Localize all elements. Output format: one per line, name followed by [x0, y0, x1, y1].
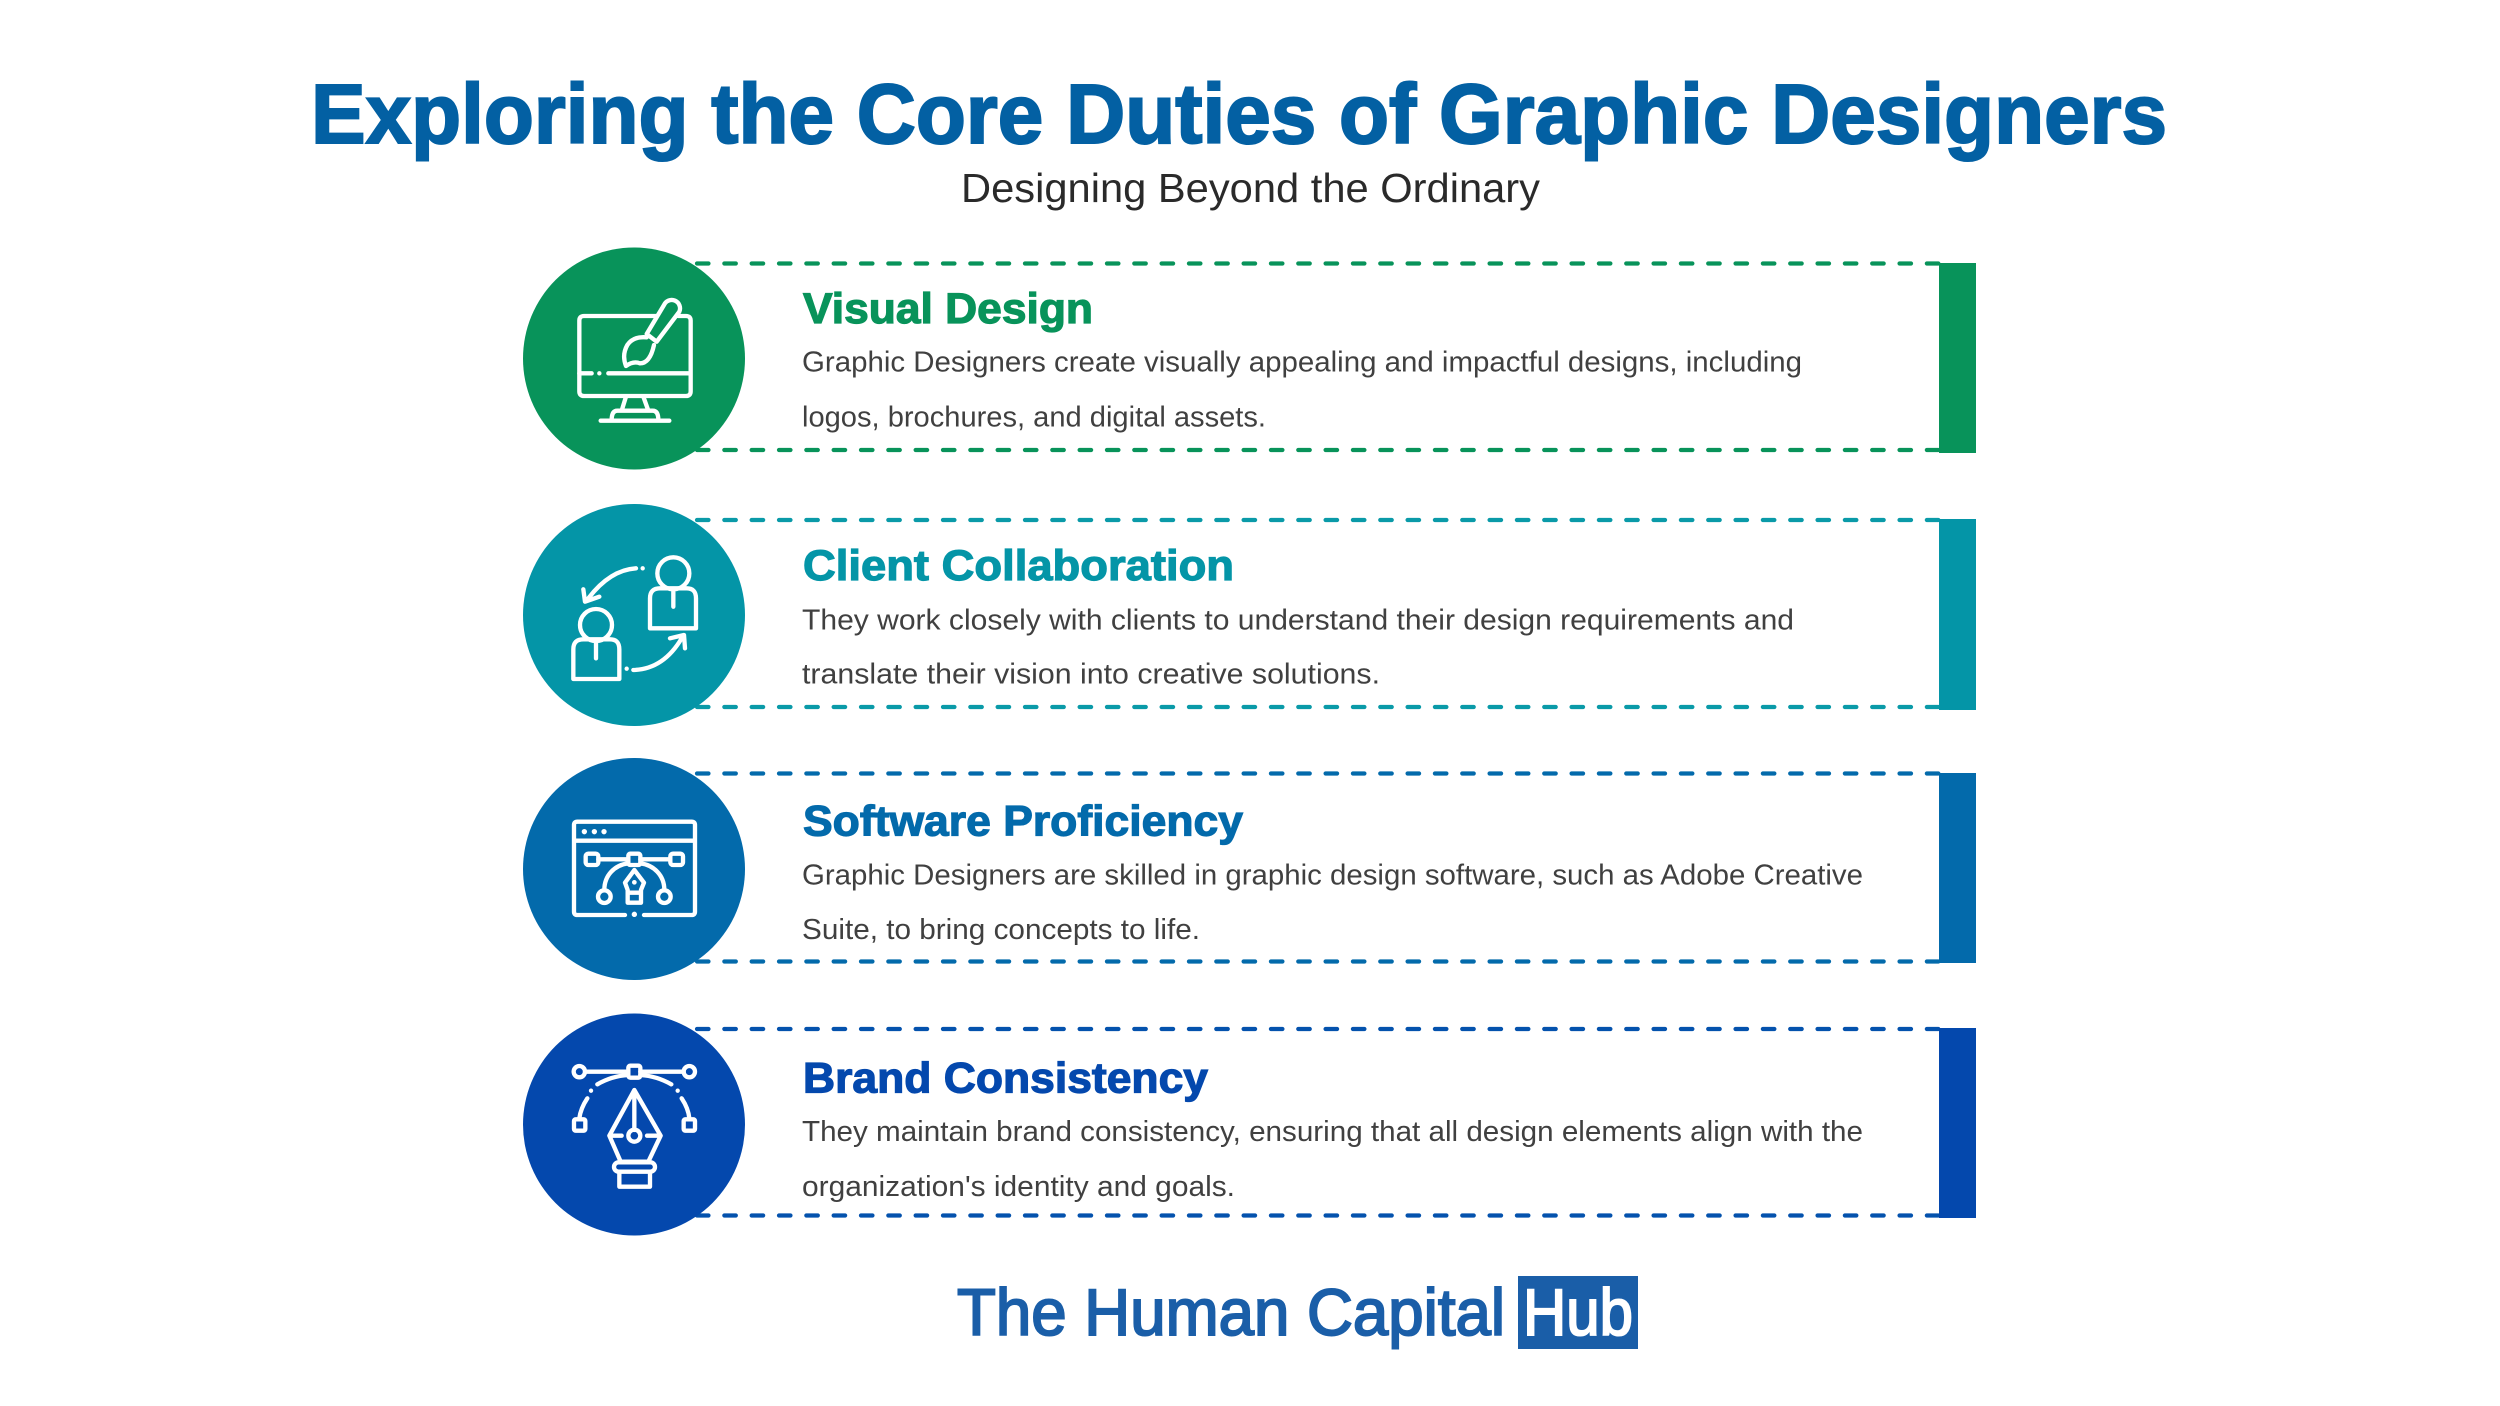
heading: brand consistency: Brand Consistency [803, 1054, 1208, 1102]
text: software proficiency: Graphic Designers are skilled in graphic design software, such as Adobe Creative [802, 860, 1863, 892]
subtitle: Designing Beyond the Ordinary [961, 165, 1541, 211]
panel: brand consistency [523, 1014, 1976, 1236]
text: client collaboration [802, 604, 1794, 690]
text: software proficiency: Suite, to bring concepts to life. [802, 914, 1200, 946]
panel: software proficiency [523, 758, 1976, 980]
text: client collaboration: They work closely with clients to understand their design requirements and [802, 604, 1794, 636]
title: Exploring the Core Duties of Graphic Designers [311, 67, 2167, 161]
heading: client collaboration: Client Collaboration [803, 542, 1234, 590]
icon circle: visual design [523, 248, 745, 470]
icon circle: brand consistency [523, 1014, 745, 1236]
icon: vector software window [574, 822, 695, 915]
accent bar: software proficiency [1939, 773, 1976, 963]
logo: The Human Capital Hub: The Human Capital [957, 1275, 1505, 1349]
icon: pen tool nib [574, 1066, 695, 1187]
text: visual design [802, 346, 1802, 434]
panel: visual design [523, 248, 1976, 470]
icon: monitor with paint brush [579, 300, 691, 421]
logo: The Human Capital Hub: Hub [1523, 1275, 1633, 1349]
icon circle: client collaboration [523, 504, 745, 726]
text: software proficiency [802, 860, 1863, 946]
icon: two people exchanging [573, 557, 696, 679]
accent bar: brand consistency [1939, 1028, 1976, 1218]
text: visual design: Graphic Designers create visually appealing and impactful designs, including [802, 346, 1802, 378]
icon circle: software proficiency [523, 758, 745, 980]
panel: client collaboration [523, 504, 1976, 726]
text: visual design: logos, brochures, and digital assets. [802, 402, 1266, 434]
text: brand consistency [802, 1116, 1863, 1203]
text: brand consistency: They maintain brand consistency, ensuring that all design elements align with the [802, 1116, 1863, 1148]
heading: visual design: Visual Design [803, 285, 1093, 333]
text: brand consistency: organization's identity and goals. [802, 1171, 1235, 1203]
text: client collaboration: translate their vision into creative solutions. [802, 658, 1380, 690]
accent bar: visual design [1939, 263, 1976, 453]
heading: software proficiency: Software Proficiency [803, 798, 1243, 846]
accent bar: client collaboration [1939, 519, 1976, 710]
